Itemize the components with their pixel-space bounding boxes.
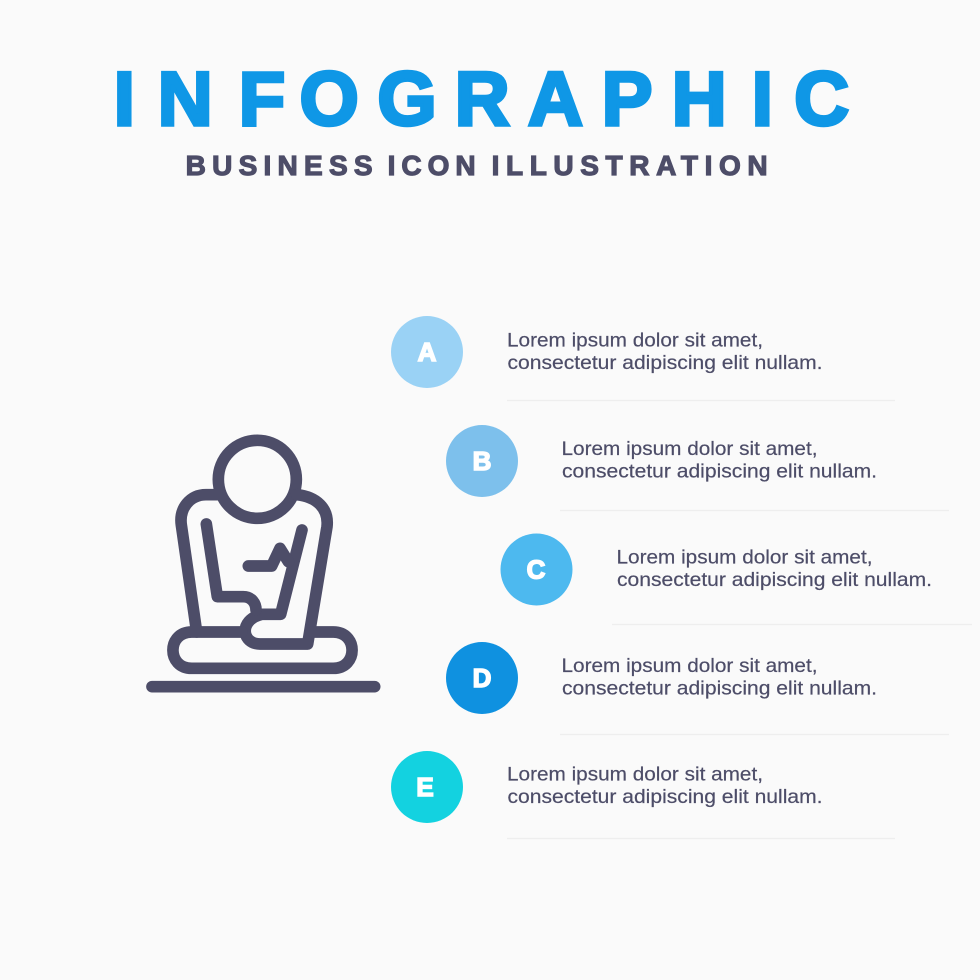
subtitle: ICON — [388, 150, 476, 181]
badge C — [500, 534, 572, 606]
text A: consectetur adipiscing elit nullam. — [508, 352, 822, 374]
title: INFOGRAPHIC — [114, 57, 849, 142]
text C — [616, 546, 932, 591]
item D — [446, 642, 949, 734]
text E — [507, 764, 822, 808]
badge A — [391, 316, 463, 388]
badge A: A — [418, 337, 437, 367]
text B — [562, 438, 877, 482]
item E — [391, 751, 895, 838]
text E: consectetur adipiscing elit nullam. — [508, 786, 822, 808]
text B: consectetur adipiscing elit nullam. — [562, 460, 877, 482]
badge D — [446, 642, 518, 714]
badge E — [391, 751, 463, 823]
item C — [500, 534, 972, 624]
badge B — [446, 425, 518, 497]
badge C: C — [527, 554, 546, 584]
badge E: E — [416, 772, 434, 802]
text D: Lorem ipsum dolor sit amet, — [562, 655, 818, 677]
badge B: B — [473, 446, 491, 476]
icon: meditating person — [152, 440, 375, 687]
subtitle: ILLUSTRATION — [492, 150, 768, 181]
item B — [446, 425, 949, 510]
text A: Lorem ipsum dolor sit amet, — [507, 330, 763, 352]
text B: Lorem ipsum dolor sit amet, — [562, 438, 818, 460]
text A — [507, 330, 822, 374]
text D — [562, 655, 877, 700]
badge D: D — [473, 663, 491, 693]
text C: Lorem ipsum dolor sit amet, — [616, 546, 872, 568]
item A — [391, 316, 895, 400]
text E: Lorem ipsum dolor sit amet, — [507, 764, 763, 786]
text D: consectetur adipiscing elit nullam. — [562, 678, 877, 700]
text C: consectetur adipiscing elit nullam. — [617, 569, 932, 591]
subtitle: BUSINESS — [186, 150, 373, 181]
